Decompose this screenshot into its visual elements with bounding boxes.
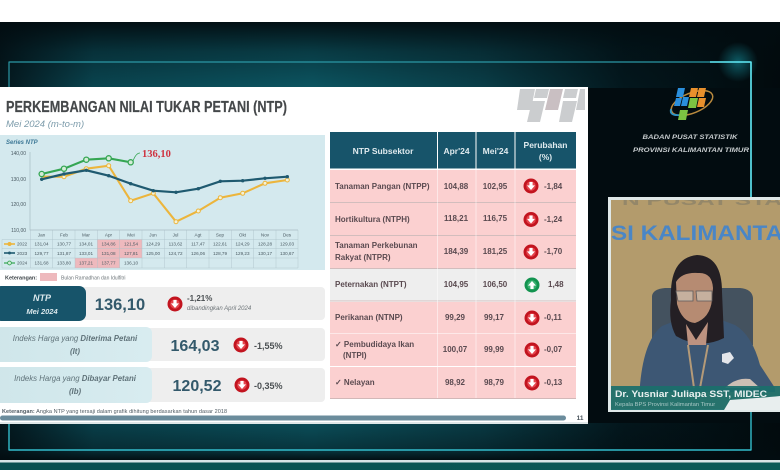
y axis labels [11,151,26,234]
row: Perikanan: -0,11 [544,313,562,322]
row: Nelayan [330,367,576,398]
organization name: PROVINSI KALIMANTAN TIMUR [633,147,749,154]
data table: Sep [216,232,225,238]
row: Tanaman Perkebunan Rakyat: Rakyat (NTPR) [335,253,391,262]
row: Tanaman Pangan: -1,84 [544,182,563,191]
data table: 134,86 [101,242,116,247]
table header: NTP Subsektor [353,146,414,156]
data table: 126,06 [191,251,205,256]
page number: 11 [577,415,584,422]
table legend keys: 2024 [17,261,28,266]
table header: Perubahan [524,140,567,150]
name bar: Kepala BPS Provinsi Kalimantan Timur [615,402,715,408]
data table: 117,47 [191,242,205,247]
row: Peternakan: 104,95 [444,280,469,289]
data table: 130,77 [57,242,71,247]
row: Tanaman Perkebunan Rakyat [330,236,576,268]
data table: Feb [60,232,68,238]
data table: 129,03 [280,242,294,247]
data table: Okt [239,232,247,238]
chair [652,288,753,345]
y axis labels: 130,00 [11,177,26,183]
data table: Apr [105,232,113,238]
row: Pembudidaya Ikan: -0,07 [544,345,563,354]
data table: 134,01 [79,242,93,247]
row: Nelayan: 98,92 [445,378,466,387]
data table: 127,81 [124,251,138,256]
row: Peternakan: 1,48 [548,280,564,289]
stat row: Indeks Harga Dibayar Petani: 120,52 [173,378,222,395]
row: Tanaman Perkebunan Rakyat: 181,25 [483,247,508,256]
row: Hortikultura: 116,75 [483,214,508,223]
row: Hortikultura [330,203,576,235]
data table: Jun [149,232,157,238]
data table: 130,17 [258,251,272,256]
stat row: Indeks Harga Dibayar Petani [0,367,325,403]
data table: 136,10 [124,261,138,266]
row: Nelayan: -0,13 [544,378,563,387]
table legend keys [4,242,28,266]
legend: Ramadan months [5,273,126,282]
legend: Ramadan months: Bulan Ramadhan dan Idulfitri [61,276,126,282]
icon: BPS logo [668,85,716,121]
table header: Mei'24 [483,146,509,156]
icon: corner logo bars [517,89,585,122]
data table: 131,68 [34,261,49,266]
y axis labels: 140,00 [11,151,26,157]
y axis labels: 120,00 [11,202,26,208]
line: 2023 [40,169,289,194]
legend: Ramadan months: Keterangan: [5,276,37,282]
data table: 137,21 [79,261,93,266]
data table: 124,72 [168,251,183,256]
row: Perikanan: 99,29 [445,313,466,322]
glowing frame line [9,62,751,450]
data table: 131,08 [101,251,116,256]
data table: 128,79 [213,251,227,256]
stat row: Indeks Harga Diterima Petani: -1,55% [254,341,283,351]
data table: 131,87 [57,251,71,256]
data table: 124,29 [146,242,160,247]
row: Nelayan: 98,79 [484,378,505,387]
stat row: NTP: NTP [33,293,52,303]
row: Hortikultura: 118,21 [444,214,469,223]
stat row: NTP: 136,10 [95,296,145,314]
data table: 129,23 [235,251,250,256]
row: Pembudidaya Ikan: (NTPI) [343,351,367,360]
stat row: NTP: -1,21% [187,294,212,303]
table header: (%) [539,152,552,162]
slide subtitle: Mei 2024 (m-to-m) [6,119,84,130]
table legend keys: 2022 [17,242,28,247]
data table: Jul [173,232,178,238]
stat row: NTP [0,286,325,321]
row: Pembudidaya Ikan: 100,07 [443,345,468,354]
row: Pembudidaya Ikan [330,334,576,366]
row: Perikanan: Perikanan (NTNP) [335,313,403,322]
footnote: Keterangan: Angka NTP yang tersaji dalam grafik dihitung berdasarkan tahun dasar 2018 [2,409,227,415]
organization name: BADAN PUSAT STATISTIK [642,134,739,141]
row: Peternakan [330,269,576,300]
table: NTP subsektor [330,132,576,398]
data table: 129,77 [34,251,49,256]
data table: 124,29 [235,242,250,247]
stat row: Indeks Harga Diterima Petani [0,327,325,362]
line: 2022 [42,164,289,224]
slide title: PERKEMBANGAN NILAI TUKAR PETANI (NTP) [6,99,287,116]
row: Perikanan [330,302,576,334]
data table: Nov [261,232,270,238]
speaker [640,255,775,392]
line: 2024 [39,156,133,177]
data table: 113,62 [169,242,183,247]
row: Tanaman Pangan: 104,88 [444,182,469,191]
row: Tanaman Perkebunan Rakyat: 184,39 [444,247,469,256]
panel: speaker video [608,192,780,412]
stat row: Indeks Harga Diterima Petani: 164,03 [171,338,220,355]
stat row: NTP: dibandingkan April 2024 [187,306,252,312]
wall lettering: SI KALIMANTA [611,222,780,245]
wall lettering: N PUSAT STA [622,192,780,208]
stat row: NTP: Mei 2024 [26,307,58,316]
table header: Apr'24 [443,146,470,156]
wall lettering [612,200,780,240]
row: Tanaman Perkebunan Rakyat: Tanaman Perkebunan [335,241,418,250]
callout: latest value: 136,10 [142,149,171,160]
chart title: Series NTP [6,140,39,146]
data table [2,230,298,268]
stat row: Indeks Harga Diterima Petani: Indeks Harga yang Diterima Petani [13,334,138,343]
data table: Jan [38,232,46,238]
row: Perikanan: 99,17 [484,313,505,322]
footer progress bar [0,416,566,420]
row: Tanaman Pangan: 102,95 [483,182,508,191]
organization name [633,134,749,154]
panel: NTP line chart [0,135,325,270]
table legend keys: 2023 [17,251,28,256]
data table: 133,80 [57,261,71,266]
data table: 133,01 [79,251,93,256]
row: Hortikultura: Hortikultura (NTPH) [335,215,410,224]
row: Peternakan: 106,50 [483,280,508,289]
data table: 128,28 [258,242,272,247]
stat row: Indeks Harga Diterima Petani: (It) [70,347,80,356]
data table: 125,00 [146,251,160,256]
data table: Mar [82,232,90,238]
row: Tanaman Perkebunan Rakyat: -1,70 [544,247,563,256]
row: Peternakan: Peternakan (NTPT) [335,280,407,289]
data table: Mei [127,232,135,238]
name bar: Dr. Yusniar Juliapa SST, MIDEC [615,389,768,399]
stat row: Indeks Harga Dibayar Petani: -0,35% [254,381,283,391]
data table: 130,67 [280,251,294,256]
row: Nelayan: ✓ Nelayan [335,378,375,387]
data table: 131,04 [34,242,49,247]
data table: 122,61 [213,242,227,247]
name bar [611,386,780,410]
data table: Des [283,232,292,238]
row: Tanaman Pangan [330,170,576,202]
row: Pembudidaya Ikan: ✓ Pembudidaya Ikan [335,340,414,349]
row: Hortikultura: -1,24 [544,215,563,224]
stat row: Indeks Harga Dibayar Petani: (Ib) [69,387,81,396]
data table: 121,54 [124,242,138,247]
data table: 137,77 [101,261,116,266]
callout: latest value [133,149,171,161]
row: Pembudidaya Ikan: 99,99 [484,345,505,354]
y axis labels: 110,00 [11,228,26,234]
row: Tanaman Pangan: Tanaman Pangan (NTPP) [335,182,430,191]
table header [330,132,576,168]
slide panel [0,87,588,424]
stat row: Indeks Harga Dibayar Petani: Indeks Harga yang Dibayar Petani [14,374,137,383]
data table: Agt [195,232,202,238]
